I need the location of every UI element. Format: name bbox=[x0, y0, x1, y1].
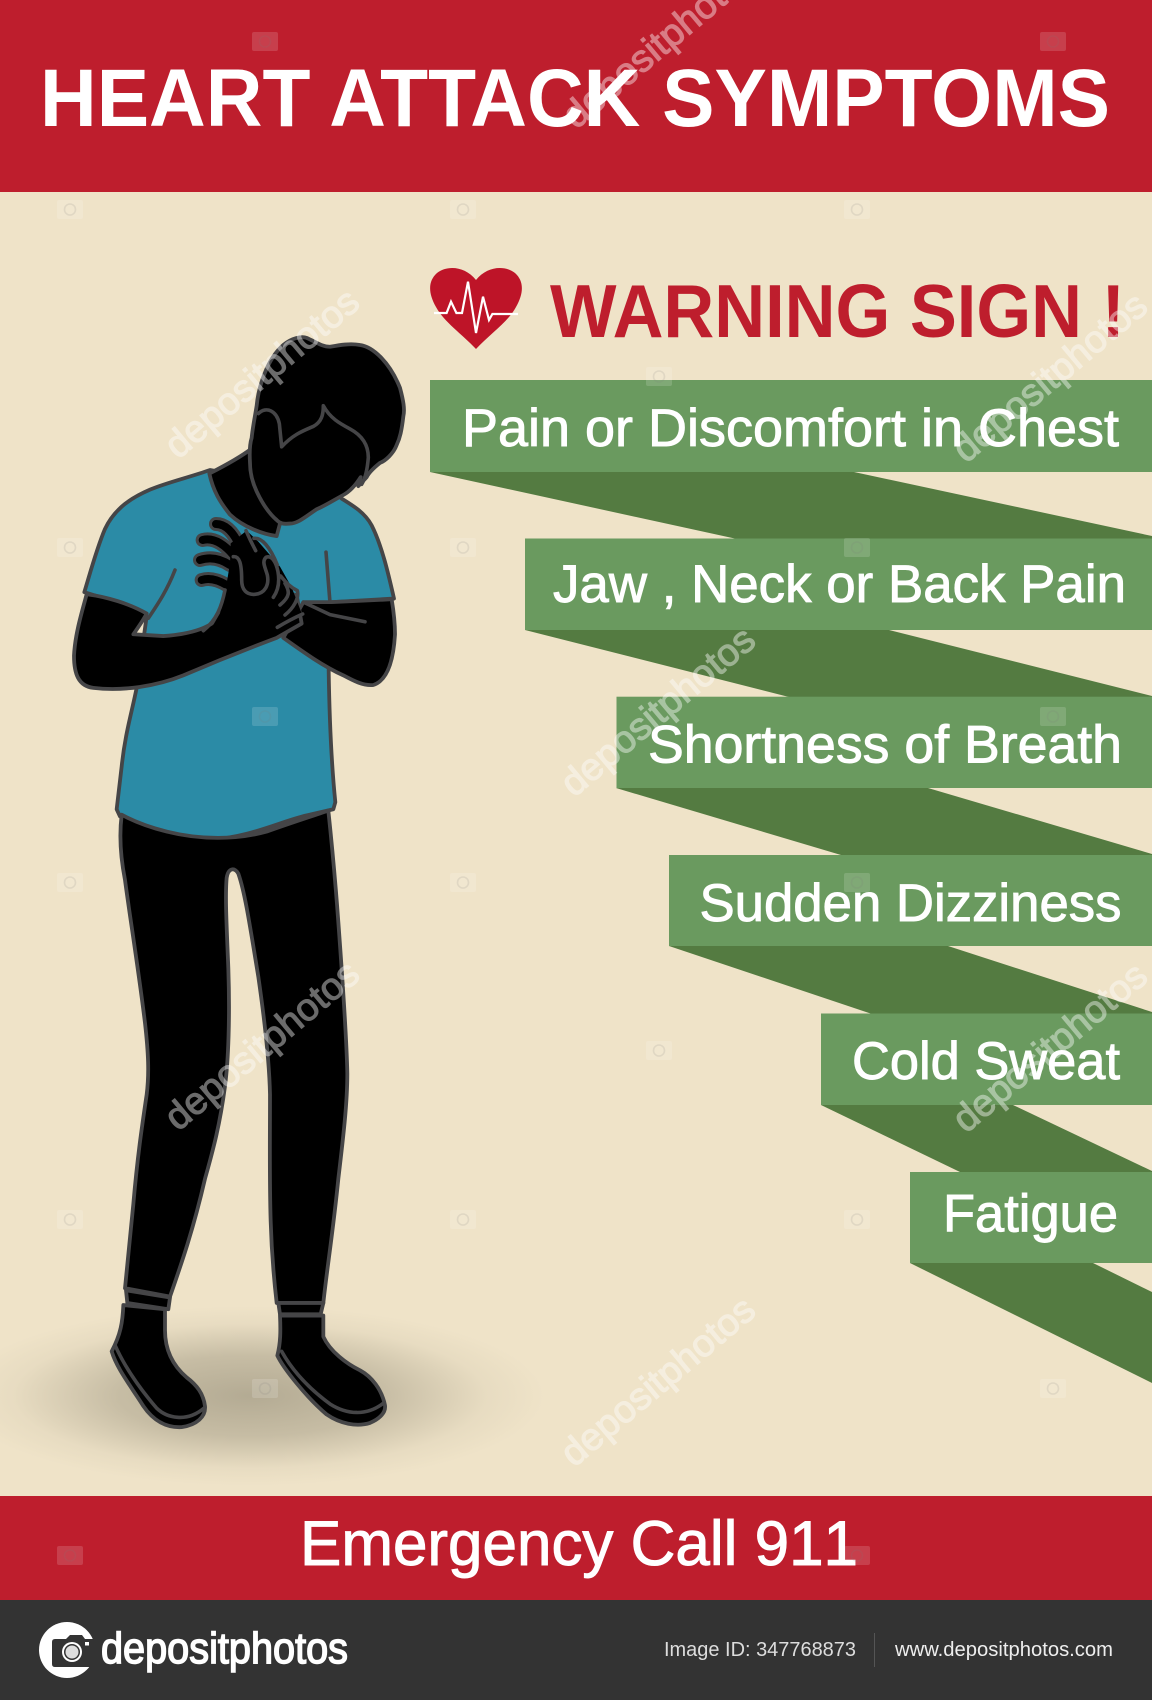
symptom: jaw, neck or back pain bbox=[525, 538, 1152, 630]
footer logo text: depositphotos bbox=[101, 1624, 348, 1673]
ribbon folds bbox=[430, 472, 1152, 1383]
image id: Image ID: 347768873 bbox=[664, 1639, 856, 1661]
footer logo icon bbox=[39, 1622, 96, 1678]
shirt bbox=[84, 470, 394, 840]
watermark overlay: depositphotos bbox=[553, 1288, 764, 1475]
symptom: cold sweat: Cold Sweat bbox=[852, 1032, 1120, 1091]
hands on chest bbox=[200, 524, 303, 631]
ground shadow bbox=[0, 1306, 545, 1486]
title: HEART ATTACK SYMPTOMS bbox=[40, 53, 1110, 144]
shirt creases bbox=[148, 552, 331, 618]
symptom: pain or discomfort in chest bbox=[430, 380, 1152, 472]
website: www.depositphotos.com bbox=[894, 1639, 1113, 1661]
watermark overlay: depositphotos bbox=[157, 952, 368, 1139]
symptom: cold sweat bbox=[821, 1014, 1152, 1105]
watermark overlay: depositphotos bbox=[945, 284, 1152, 471]
hair line bbox=[258, 406, 368, 484]
symptom: shortness of breath bbox=[616, 697, 1152, 788]
symptom: shortness of breath: Shortness of Breath bbox=[648, 716, 1122, 774]
symptom: fatigue bbox=[910, 1172, 1152, 1263]
symptom: sudden dizziness bbox=[669, 855, 1152, 946]
upper body bbox=[74, 337, 404, 840]
emergency banner bbox=[0, 1496, 1152, 1600]
watermark overlay: depositphotos bbox=[157, 280, 368, 467]
header banner bbox=[0, 0, 1152, 192]
emergency text: Emergency Call 911 bbox=[300, 1509, 858, 1579]
arm: viewer left bbox=[74, 584, 302, 689]
symptom: fatigue: Fatigue bbox=[943, 1184, 1118, 1244]
watermark overlay: depositphotos bbox=[553, 618, 764, 805]
warning heading bbox=[430, 268, 1125, 353]
warning text: WARNING SIGN ! bbox=[550, 269, 1125, 353]
watermark overlay: depositphotos bbox=[945, 954, 1152, 1141]
left shoe bbox=[112, 1305, 205, 1427]
footer bar bbox=[0, 1600, 1152, 1700]
icon: heart with pulse bbox=[430, 268, 522, 349]
hand outlines bbox=[203, 531, 303, 631]
ribbon list of symptoms bbox=[430, 380, 1152, 1383]
cuffs bbox=[126, 1290, 323, 1314]
head and hair bbox=[250, 337, 404, 524]
right shoe bbox=[277, 1316, 385, 1425]
symptom: pain or discomfort in chest: Pain or Discomfort in Chest bbox=[462, 399, 1119, 458]
neck bbox=[209, 449, 280, 536]
trousers bbox=[120, 811, 347, 1303]
fingers bbox=[200, 524, 240, 585]
arm: viewer right bbox=[283, 599, 395, 685]
lower body bbox=[112, 811, 385, 1427]
person figure bbox=[74, 337, 404, 1427]
symptom: jaw, neck or back pain: Jaw , Neck or Back Pain bbox=[553, 555, 1126, 614]
symptom: sudden dizziness: Sudden Dizziness bbox=[700, 874, 1122, 933]
palm bbox=[210, 531, 302, 631]
